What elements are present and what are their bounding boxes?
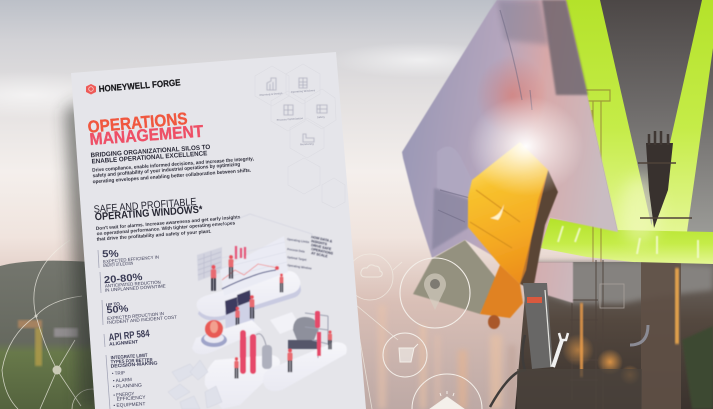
refinery overlay: left tower [579, 90, 610, 262]
intro text: operating envelopes and enabling better collaboration between shifts. [92, 168, 252, 185]
red process columns [240, 330, 246, 374]
section heading: SAFE AND PROFITABLE [93, 196, 197, 216]
chart lines [222, 270, 276, 289]
outline frame [222, 214, 312, 250]
network icon: shopping cart in circle [383, 333, 427, 377]
hexagon icon labels: Planning & Design [259, 91, 283, 97]
console with monitors [225, 297, 254, 336]
shelf rack with red column [305, 313, 328, 358]
vest: horizontal reflective band [540, 218, 713, 264]
staff figures on upper platform [211, 265, 216, 291]
list: integrate limit types: • ENERGY [113, 391, 135, 399]
section text [96, 214, 241, 243]
section text: on operational performance. With tighter operating envelopes [96, 220, 236, 237]
stat: 5%: 5% [102, 249, 119, 260]
list: integrate limit types: • PLANNING [113, 382, 142, 390]
icon: hard hat [468, 142, 558, 329]
tool pouch with wrench [490, 283, 642, 409]
intro text: Drive compliance, enable informed decisions, and increase the integrity, [92, 156, 255, 174]
list: integrate limit types: INTEGRATE LIMIT [110, 353, 148, 361]
worker: lower body with refinery overlay [515, 260, 713, 409]
upper platform [197, 271, 301, 317]
list: integrate limit types: DECISION-MAKING [110, 360, 158, 370]
hexagon icon labels [259, 88, 326, 146]
hexagon pattern [255, 64, 345, 208]
list: integrate limit types: TYPES FOR BETTER [110, 357, 153, 365]
section text: Don't wait for alarms. Increase awareness and get early insights [96, 214, 241, 232]
lower middle platform [205, 355, 280, 409]
network icon: sun over building in circle [412, 374, 482, 409]
small factories [168, 360, 222, 409]
worker: sleeve and arm [402, 0, 618, 303]
stat: up to 50%: UP TO [106, 301, 120, 309]
vest: left reflective strap [565, 0, 653, 232]
section text: that drive the profitability and safety of your plant. [96, 229, 212, 243]
stat: 20-80% [100, 272, 166, 293]
shadow behind document [66, 100, 108, 409]
worker: glove [413, 240, 500, 314]
stat: API RP 584: API RP 584 [108, 328, 150, 344]
lower right platform [263, 342, 347, 391]
stat: 20-80%: 20-80% [104, 272, 143, 286]
wall labels: Process Data [287, 247, 305, 254]
list: integrate limit types: • EQUIPMENT [113, 401, 146, 409]
lower left platform with reactor sphere [192, 320, 262, 354]
hexagon icon labels: Monitoring [300, 142, 314, 146]
worker: torso and reflective vest [540, 0, 713, 264]
dark callout text: DRIVE SAFE [311, 243, 332, 251]
document: infographic sheet [71, 52, 366, 409]
wall labels: Operating Window [287, 263, 313, 271]
stat: 5% [98, 249, 159, 268]
stat: 5%: EXPECTED EFFICIENCY IN [103, 254, 159, 264]
vest: right reflective strap [650, 0, 713, 232]
hexagon icon labels: Safety [317, 115, 326, 119]
gray tanks [262, 345, 272, 369]
refinery overlay: right tower [638, 131, 692, 228]
stat: up to 50%: INCIDENT AND INCIDENT COST [107, 315, 177, 325]
dark callout text [311, 235, 334, 259]
background: hazy refinery towers [378, 305, 516, 409]
section heading [93, 196, 204, 223]
list: integrate limit types: • TRIP [112, 370, 125, 377]
title: OPERATIONS [87, 109, 188, 137]
stat: up to 50% [102, 300, 177, 325]
illustration: isometric operations control room [168, 214, 347, 409]
subtitle: BRIDGING ORGANIZATIONAL SILOS TO [90, 144, 211, 159]
intro text: safety and profitability of your industrial operations by optimizing [92, 162, 240, 179]
wall labels [287, 237, 313, 271]
section heading: OPERATING WINDOWS* [94, 204, 204, 223]
stat: up to 50%: 50% [106, 303, 130, 316]
stat: API RP 584: ALIGNMENT [109, 339, 138, 348]
stat: 20-80%: IN UNPLANNED DOWNTIME [105, 283, 166, 293]
dark callout text: HOW DATA & [311, 235, 333, 244]
ramp [270, 312, 300, 334]
dark callout text: OPERATIONS [311, 247, 334, 256]
light flare over shirt and hat [468, 96, 584, 196]
stat: 5%: ENERGY UTILIZATION [103, 261, 133, 268]
domed vessel [293, 317, 318, 340]
hexagon icon labels: Process Optimization [277, 116, 304, 122]
back wall with chart panel [220, 236, 288, 296]
subtitle: ENABLE OPERATIONAL EXCELLENCE [91, 150, 208, 165]
dark callout text: AT SCALE [311, 251, 329, 259]
title [87, 109, 205, 149]
intro text [92, 156, 255, 185]
wall labels: Operating Limits [287, 237, 310, 244]
stat: 20-80%: ANTICIPATED REDUCTION [105, 280, 161, 288]
list: integrate limit types: • ALARM [113, 377, 132, 384]
list: integrate limit types [106, 353, 158, 409]
stat: API RP 584 [104, 328, 150, 348]
hexagon icons: operations modules [267, 78, 327, 142]
dark callout text: INSIGHTS [311, 239, 328, 246]
wall labels: Optimal Target [287, 255, 307, 262]
hexagon icon labels: Operating Windows [291, 88, 316, 94]
network graphic: connecting lines and circles [2, 240, 402, 409]
list: integrate limit types: EFFICIENCY [116, 395, 147, 403]
logo: Honeywell Forge: HONEYWELL FORGE [98, 77, 181, 94]
sheet page [71, 52, 366, 409]
stat: up to 50%: EXPECTED REDUCTION IN [107, 311, 164, 321]
background: hillside with trees [0, 261, 110, 409]
worker: sleeve shading and folds [432, 0, 588, 250]
title: MANAGEMENT [89, 122, 205, 149]
network icon: location pin in circle [400, 258, 470, 328]
wall panel left [197, 247, 222, 281]
